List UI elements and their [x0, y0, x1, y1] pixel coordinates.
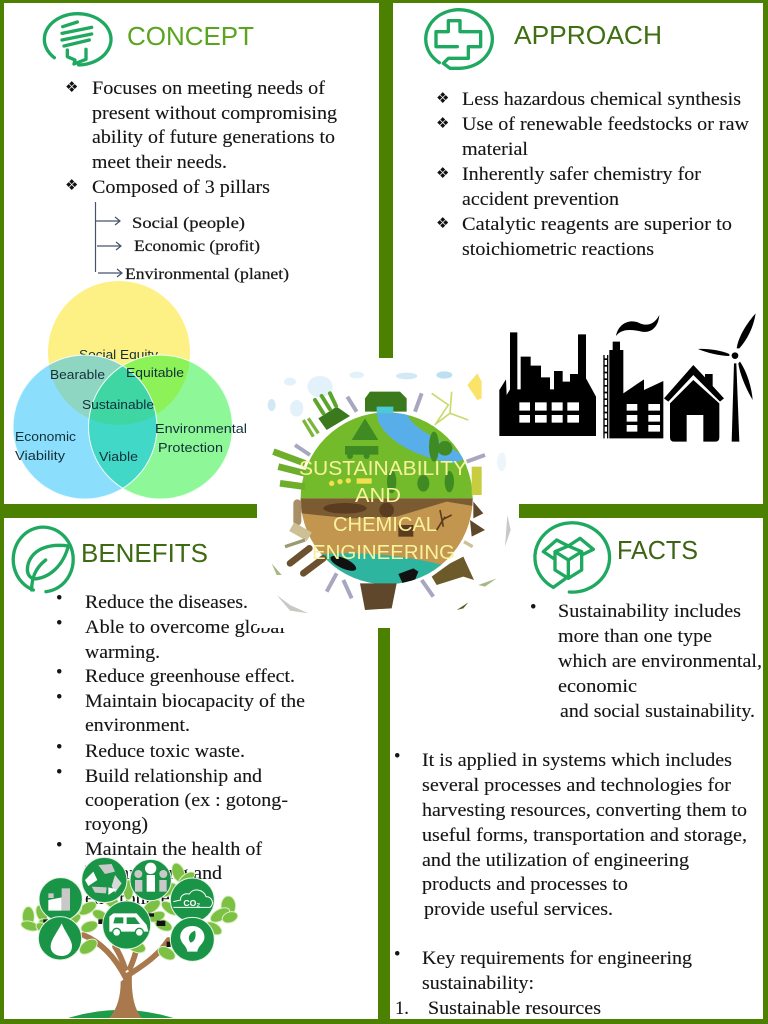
- venn diagram: three pillars: Bearable: [50, 367, 105, 382]
- illustration: sustainability globe: [268, 371, 511, 613]
- illustration: green technology tree: [20, 857, 239, 1018]
- tree icon: CO2 cloud: [173, 890, 212, 908]
- text block: concept bullets: present without compromising: [92, 104, 337, 124]
- text block: facts bullets: Sustainable resources: [428, 999, 601, 1019]
- text block: facts bullets: economic: [558, 677, 637, 697]
- icon: box (facts): [535, 523, 610, 592]
- text block: benefits bullets: cooperation (ex : gotong-: [85, 791, 288, 811]
- venn diagram: three pillars: Social Equity: [79, 347, 159, 362]
- text block: benefits bullets: environment: [85, 889, 186, 909]
- text block: facts bullets: Sustainability includes: [558, 602, 741, 622]
- text block: benefits bullets: •: [56, 738, 62, 758]
- text block: benefits bullets: warming.: [85, 643, 160, 663]
- text block: facts bullets: and social sustainability.: [560, 702, 755, 722]
- text block: benefits bullets: •: [56, 663, 62, 683]
- text block: benefits bullets: Maintain biocapacity of the: [85, 692, 305, 712]
- text block: facts bullets: which are environmental,: [558, 652, 762, 672]
- text block: approach bullets: stoichiometric reactions: [462, 240, 654, 260]
- text block: approach bullets: ❖: [436, 214, 449, 232]
- venn diagram: three pillars: Viability: [15, 448, 66, 463]
- heading: facts: FACTS: [617, 535, 698, 565]
- text block: facts bullets: and the utilization of engineering: [422, 851, 689, 871]
- text block: benefits bullets: human being and: [85, 864, 223, 884]
- text block: approach bullets: material: [462, 140, 528, 160]
- text block: approach bullets: Inherently safer chemistry for: [462, 165, 701, 185]
- panel: concept: [4, 3, 379, 504]
- globe surroundings: factories, pylons, turbines: [272, 392, 511, 613]
- text block: approach bullets: Use of renewable feedstocks or raw: [462, 115, 750, 135]
- text block: benefits bullets: Maintain the health of: [85, 840, 263, 860]
- text block: benefits bullets: •: [56, 589, 62, 609]
- factory one: [499, 332, 596, 436]
- text block: benefits bullets: royong): [85, 815, 148, 835]
- text block: facts bullets: provide useful services.: [424, 900, 613, 920]
- tree icon: water drop: [51, 923, 72, 956]
- text block: approach bullets: [436, 89, 750, 260]
- text block: facts bullets: •: [394, 747, 400, 767]
- venn diagram: three pillars: Protection: [158, 440, 223, 455]
- text block: facts bullets: 1.: [395, 999, 409, 1019]
- venn diagram: three pillars: [13, 281, 247, 499]
- tree icon: people: [134, 863, 167, 892]
- text block: concept bullets: ability of future generations to: [92, 128, 335, 148]
- tree icon: van: [109, 913, 148, 936]
- text block: facts bullets: more than one type: [558, 627, 712, 647]
- icon: approach plus symbol: [426, 10, 492, 68]
- center panel background: [257, 358, 519, 628]
- text block: benefits bullets: Build relationship and: [85, 767, 263, 787]
- panel: facts: [390, 518, 763, 1019]
- text block: concept bullets: meet their needs.: [92, 153, 227, 173]
- tree icon: factory: [48, 888, 70, 911]
- pillar list with arrows: Economic (profit): [134, 238, 260, 255]
- text block: approach bullets: Catalytic reagents are superior to: [462, 215, 732, 235]
- text block: benefits bullets: •: [56, 763, 62, 783]
- illustration: factory, house and wind turbine silhouette: [499, 313, 756, 442]
- text block: approach bullets: ❖: [436, 89, 449, 107]
- icon: light bulb: [44, 14, 111, 65]
- text block: benefits bullets: Reduce toxic waste.: [85, 742, 245, 762]
- text block: approach bullets: accident prevention: [462, 190, 619, 210]
- text block: benefits bullets: Reduce the diseases.: [85, 593, 248, 613]
- text block: benefits bullets: [56, 589, 305, 909]
- wind turbine: [698, 313, 756, 442]
- text block: benefits bullets: •: [56, 614, 62, 634]
- text block: concept bullets: [65, 78, 337, 198]
- heading: approach: APPROACH: [514, 20, 662, 50]
- text block: benefits bullets: environment.: [85, 716, 190, 736]
- heading: benefits: BENEFITS: [81, 538, 208, 568]
- factory two with smoke: [603, 315, 663, 438]
- text block: facts bullets: •: [530, 598, 536, 618]
- center title: ENGINEERING: [312, 542, 455, 564]
- text block: facts bullets: several processes and technologies for: [422, 776, 731, 796]
- text block: facts bullets: sustainability:: [422, 974, 534, 994]
- text block: approach bullets: Less hazardous chemical synthesis: [462, 90, 741, 110]
- text block: facts bullets: products and processes to: [422, 875, 628, 895]
- text block: benefits bullets: •: [56, 688, 62, 708]
- center title: AND: [355, 485, 401, 507]
- text block: concept bullets: ❖: [65, 78, 78, 96]
- text block: facts bullets: •: [394, 945, 400, 965]
- tree icon: recycle: [85, 864, 122, 895]
- text block: facts bullets: Key requirements for engineering: [422, 949, 692, 969]
- venn diagram: three pillars: Sustainable: [82, 397, 154, 412]
- venn diagram: three pillars: Equitable: [126, 365, 184, 380]
- pillar list with arrows: [96, 202, 289, 283]
- panel: benefits: [4, 518, 378, 1019]
- venn diagram: three pillars: Environmental: [155, 421, 247, 436]
- text block: benefits bullets: Able to overcome global: [85, 618, 285, 638]
- center title: SUSTAINABILITY: [299, 458, 467, 480]
- icon: leaf: [13, 527, 73, 592]
- text block: concept bullets: ❖: [65, 176, 78, 194]
- text block: approach bullets: ❖: [436, 114, 449, 132]
- pillar list with arrows: Environmental (planet): [125, 266, 289, 283]
- center title: CHEMICAL: [333, 514, 437, 536]
- text block: approach bullets: ❖: [436, 164, 449, 182]
- center title: [299, 458, 467, 564]
- tree icon: CO2 cloud: CO₂: [183, 898, 200, 908]
- text block: facts bullets: [394, 598, 762, 1019]
- text block: benefits bullets: Reduce greenhouse effect.: [85, 667, 295, 687]
- text block: facts bullets: harvesting resources, converting them to: [422, 801, 747, 821]
- panel: approach: [393, 3, 763, 504]
- venn diagram: three pillars: Economic: [15, 429, 77, 444]
- pillar list with arrows: Social (people): [132, 215, 245, 232]
- heading: concept: CONCEPT: [127, 21, 254, 51]
- house: [664, 365, 724, 442]
- text block: facts bullets: It is applied in systems which includes: [422, 751, 732, 771]
- tree icon: bulb with leaf: [180, 926, 204, 952]
- text block: concept bullets: Composed of 3 pillars: [92, 178, 270, 198]
- text block: benefits bullets: •: [56, 836, 62, 856]
- venn diagram: three pillars: Viable: [99, 449, 138, 464]
- text block: concept bullets: Focuses on meeting needs of: [92, 79, 326, 99]
- text block: facts bullets: useful forms, transportation and storage,: [422, 826, 747, 846]
